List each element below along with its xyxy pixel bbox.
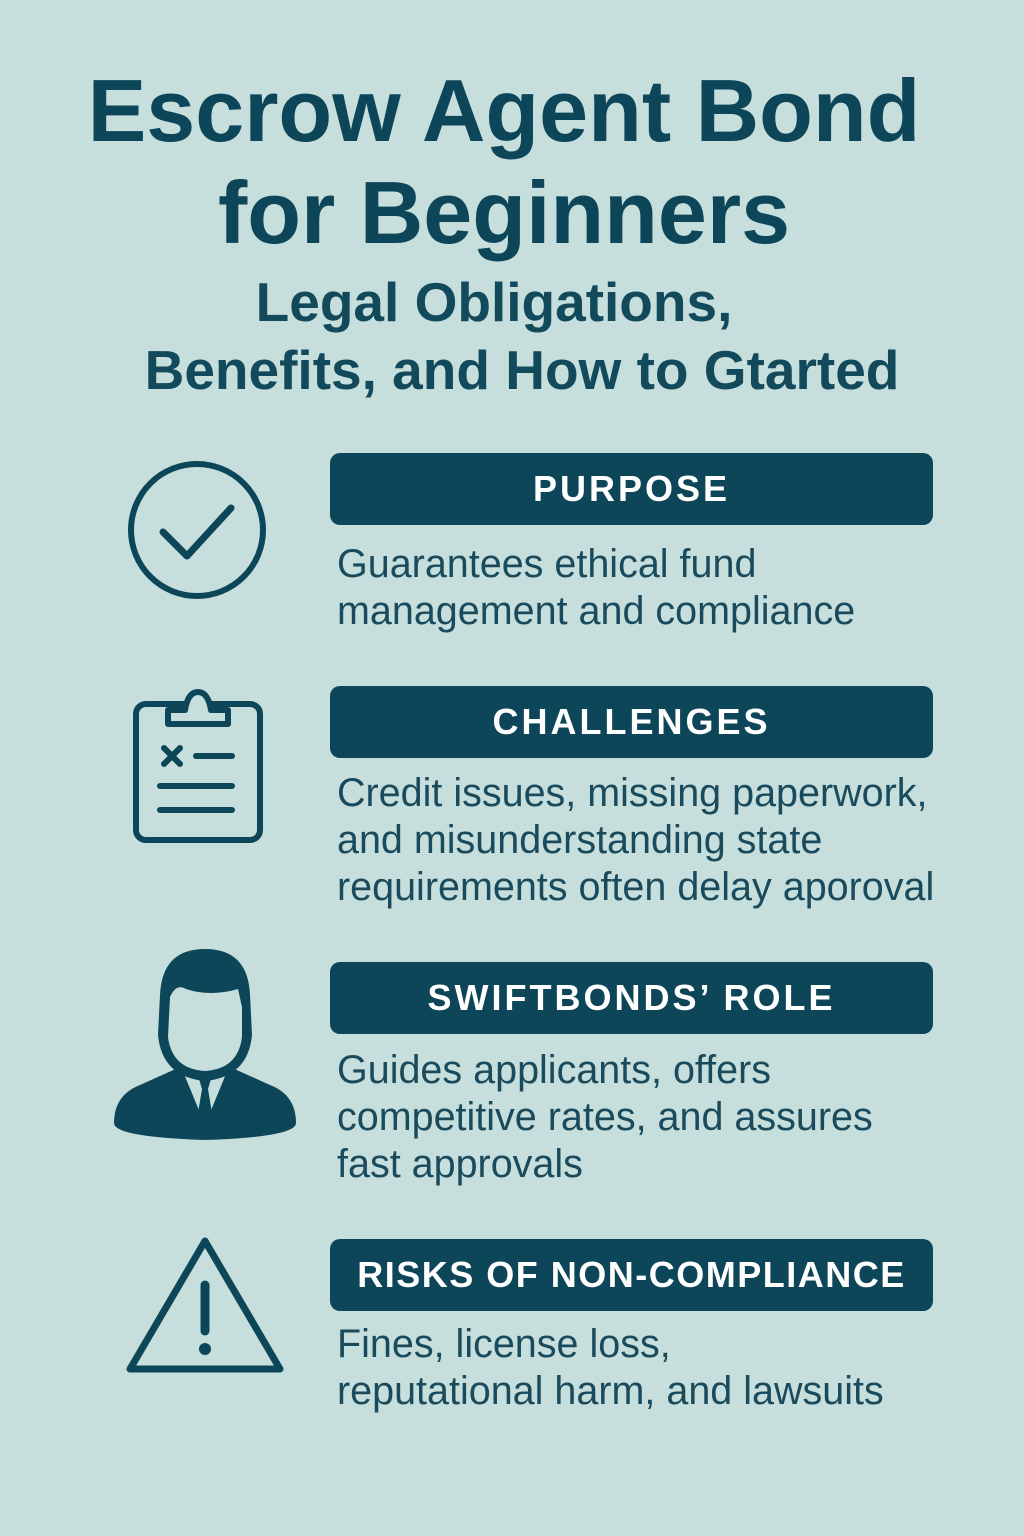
- text: swiftbonds role: fast approvals: [337, 1142, 583, 1186]
- bar: swiftbonds role: [330, 962, 933, 1034]
- text: purpose: Guarantees ethical fund: [337, 542, 756, 586]
- bar: risks: [330, 1239, 933, 1311]
- subtitle: [145, 271, 899, 401]
- subtitle: Legal Obligations,: [256, 271, 732, 333]
- bar: challenges: [330, 686, 933, 758]
- title: Escrow Agent Bond: [88, 61, 920, 160]
- icon: clipboard: [133, 689, 263, 843]
- title: [88, 61, 920, 262]
- text: risks: Fines, license loss,: [337, 1322, 671, 1366]
- text: challenges: requirements often delay aporoval: [337, 865, 934, 909]
- text: swiftbonds role: competitive rates, and assures: [337, 1095, 873, 1139]
- text: risks: reputational harm, and lawsuits: [337, 1369, 884, 1413]
- icon: warning: [126, 1238, 284, 1372]
- bar: purpose: [330, 453, 933, 525]
- text: swiftbonds role: Guides applicants, offers: [337, 1048, 771, 1092]
- text: challenges: and misunderstanding state: [337, 818, 822, 862]
- text: purpose: [337, 542, 855, 633]
- text: swiftbonds role: [337, 1048, 873, 1186]
- icon: check circle: [128, 461, 266, 599]
- text: purpose: management and compliance: [337, 589, 855, 633]
- bar: swiftbonds role: SWIFTBONDS’ ROLE: [428, 977, 836, 1018]
- icon: businessman: [114, 949, 296, 1140]
- text: risks: [337, 1322, 884, 1413]
- text: challenges: Credit issues, missing paperwork,: [337, 771, 928, 815]
- title: for Beginners: [218, 163, 790, 262]
- bar: risks: RISKS OF NON-COMPLIANCE: [357, 1254, 906, 1295]
- subtitle: Benefits, and How to Gtarted: [145, 339, 899, 401]
- text: challenges: [337, 771, 934, 909]
- bar: challenges: CHALLENGES: [492, 701, 770, 742]
- bar: purpose: PURPOSE: [533, 468, 730, 509]
